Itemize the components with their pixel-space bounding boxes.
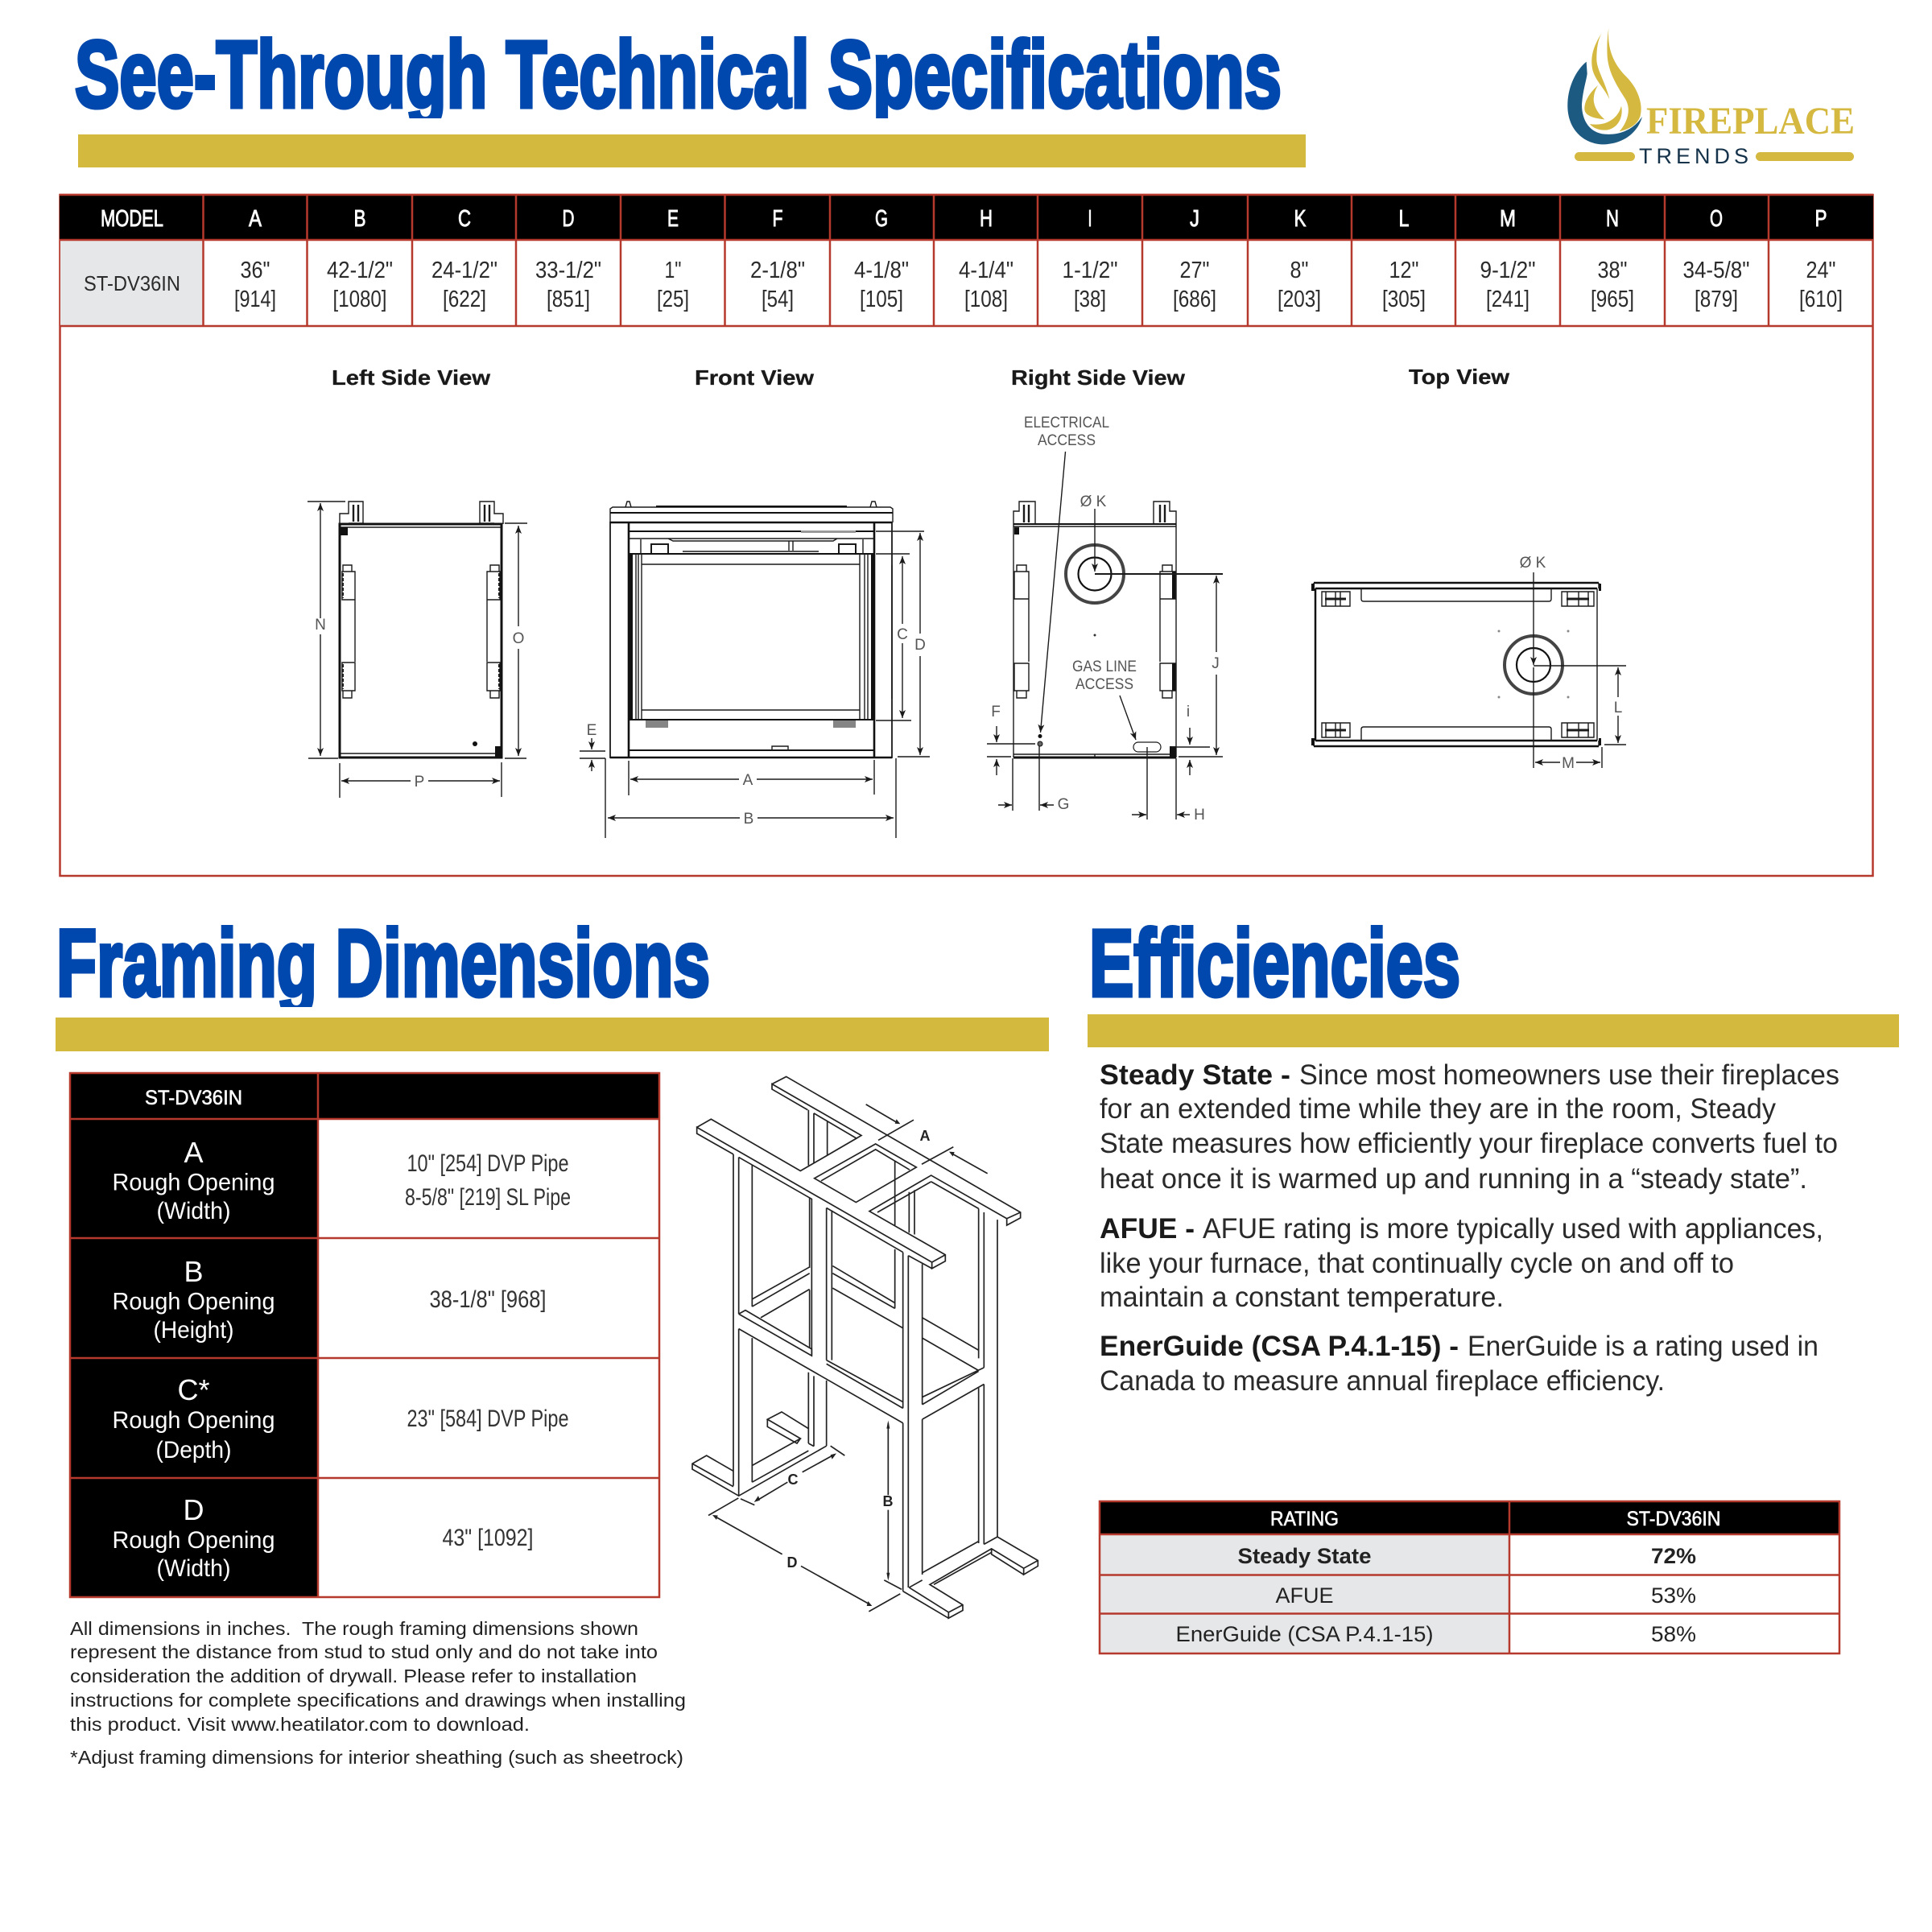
- framing gold bar: [56, 1018, 1049, 1051]
- efficiency rating table: [1100, 1501, 1839, 1653]
- table values: [686]: [1173, 287, 1216, 312]
- row B: Rough Opening: [113, 1288, 275, 1315]
- row A: [113, 1136, 571, 1224]
- framing dimension labels: B: [882, 1493, 894, 1509]
- row A: (Width): [156, 1198, 230, 1224]
- table header: N: [1606, 206, 1619, 232]
- heading: left side view: Left Side View: [332, 365, 491, 390]
- title gold bar: [78, 134, 1306, 167]
- table values: 1-1/2": [1063, 258, 1117, 283]
- table values: 36": [240, 258, 270, 283]
- icon: flame: [1567, 28, 1642, 144]
- table header: B: [354, 206, 365, 232]
- table values: [38]: [1074, 287, 1106, 312]
- row C: Rough Opening: [113, 1407, 275, 1434]
- table header: I: [1088, 206, 1092, 232]
- diagram: front view: E: [587, 722, 597, 739]
- framing dimension labels: [787, 1128, 931, 1571]
- callout: gas line access: ACCESS: [1075, 676, 1133, 693]
- panel frame: [60, 195, 1872, 876]
- table header: K: [1294, 206, 1307, 232]
- steady state paragraph: for an extended time while they are in the room, Steady: [1100, 1093, 1776, 1125]
- table values: 33-1/2": [535, 258, 601, 283]
- diagram: right side view: H: [1194, 807, 1205, 824]
- table values: [234, 258, 1843, 312]
- AFUE paragraph: AFUE rating is more typically used with appliances,: [1203, 1213, 1823, 1245]
- logo subtitle: TRENDS: [1639, 144, 1748, 168]
- rating: EnerGuide: EnerGuide (CSA P.4.1-15): [1175, 1622, 1433, 1646]
- diagram: left side view: O: [513, 630, 524, 647]
- table values: 24-1/2": [431, 258, 497, 283]
- rating table header: ST-DV36IN: [1626, 1508, 1721, 1530]
- table header: H: [980, 206, 993, 232]
- steady state paragraph: [1100, 1059, 1839, 1195]
- row B: 38-1/8" [968]: [430, 1286, 546, 1313]
- table values: 42-1/2": [327, 258, 393, 283]
- heading: efficiencies: Efficiencies: [1089, 910, 1460, 1017]
- table header: C: [458, 206, 471, 232]
- EnerGuide paragraph: [1100, 1331, 1818, 1397]
- panel: specifications table and views: [60, 195, 1873, 876]
- framing footnotes: this product. Visit www.heatilator.com to download.: [70, 1714, 530, 1735]
- table header: [60, 195, 1873, 240]
- table values: 4-1/4": [959, 258, 1013, 283]
- table values: 24": [1806, 258, 1835, 283]
- diagram: right side view: Ø K: [1080, 493, 1107, 510]
- rating: AFUE: AFUE: [1275, 1583, 1333, 1608]
- steady state paragraph: Since most homeowners use their fireplaces: [1299, 1059, 1839, 1091]
- table values: 4-1/8": [854, 258, 909, 283]
- table values: [1080]: [333, 287, 386, 312]
- table header: D: [562, 206, 575, 232]
- diagram: top view: Ø K: [1520, 555, 1546, 572]
- heading: framing dimensions: Framing Dimensions: [56, 910, 710, 1017]
- table header: F: [773, 206, 782, 232]
- diagram: front view: B: [744, 811, 753, 828]
- table header: E: [667, 206, 679, 232]
- row D: D: [184, 1493, 204, 1526]
- callout: gas line access: [1072, 658, 1137, 693]
- table values: [879]: [1695, 287, 1738, 312]
- table values: [305]: [1382, 287, 1426, 312]
- framing footnotes: All dimensions in inches. The rough framing dimensions shown: [70, 1618, 638, 1639]
- steady state paragraph: State measures how efficiently your fireplace converts fuel to: [1100, 1128, 1838, 1159]
- rating: steady state: [1238, 1544, 1696, 1568]
- framing dimension labels: D: [787, 1554, 797, 1571]
- diagram: top view: [1311, 555, 1626, 772]
- efficiencies text: [1100, 1059, 1839, 1397]
- framing footnotes: represent the distance from stud to stud only and do not take into: [70, 1641, 658, 1662]
- rating: AFUE: 53%: [1651, 1583, 1696, 1608]
- table header: M: [1500, 206, 1516, 232]
- framing footnotes: *Adjust framing dimensions for interior sheathing (such as sheetrock): [70, 1747, 683, 1768]
- table values: [241]: [1486, 287, 1530, 312]
- logo bars: [1575, 152, 1854, 161]
- heading: front view: Front View: [695, 365, 815, 390]
- table values: 1": [665, 258, 681, 283]
- title: See-Through Technical Specifications: [75, 22, 1282, 128]
- table values: 38": [1597, 258, 1628, 283]
- table values: [25]: [657, 287, 689, 312]
- logo: Fireplace Trends: [1567, 28, 1855, 168]
- EnerGuide paragraph: Canada to measure annual fireplace efficiency.: [1100, 1365, 1665, 1397]
- heading: top view: Top View: [1409, 365, 1510, 389]
- callout: gas line access: GAS LINE: [1072, 658, 1137, 675]
- table header: O: [1710, 206, 1723, 232]
- row C: C*: [177, 1373, 210, 1406]
- table values: [610]: [1799, 287, 1843, 312]
- table values: [54]: [762, 287, 794, 312]
- table values: [622]: [443, 287, 486, 312]
- row A: 8-5/8" [219] SL Pipe: [405, 1184, 571, 1211]
- efficiencies gold bar: [1088, 1014, 1899, 1047]
- framing table header: ST-DV36IN: [145, 1087, 242, 1109]
- diagram: right side view: G: [1058, 796, 1069, 813]
- logo wordmark: FIREPLACE: [1646, 100, 1855, 142]
- EnerGuide paragraph: EnerGuide is a rating used in: [1468, 1331, 1818, 1362]
- callout: electrical access: ELECTRICAL: [1024, 415, 1109, 431]
- row A: 10" [254] DVP Pipe: [407, 1150, 568, 1177]
- table values: 8": [1290, 258, 1309, 283]
- framing dimensions table: [70, 1073, 659, 1597]
- framing dimension labels: A: [919, 1128, 931, 1144]
- table values: [108]: [964, 287, 1008, 312]
- framing dimension labels: C: [787, 1472, 799, 1488]
- table values: [105]: [860, 287, 903, 312]
- diagram: right side view: J: [1212, 655, 1220, 672]
- diagram: left side view: N: [315, 617, 326, 634]
- row C: 23" [584] DVP Pipe: [407, 1406, 568, 1432]
- table header: P: [1814, 206, 1827, 232]
- table header: A: [249, 206, 262, 232]
- table values: 2-1/8": [750, 258, 805, 283]
- diagram: front view: D: [914, 637, 926, 654]
- framing footnotes: instructions for complete specifications and drawings when installing: [70, 1690, 686, 1711]
- row B: [113, 1255, 546, 1344]
- AFUE paragraph: maintain a constant temperature.: [1100, 1282, 1504, 1313]
- callout: electrical access: [1024, 415, 1109, 449]
- framing footnotes: consideration the addition of drywall. Please refer to installation: [70, 1666, 637, 1686]
- heading: right side view: Right Side View: [1011, 365, 1186, 390]
- rating: EnerGuide: [1175, 1622, 1696, 1646]
- rating table header: RATING: [1270, 1508, 1339, 1530]
- row D: Rough Opening: [113, 1527, 275, 1554]
- diagram: front view: C: [897, 626, 908, 643]
- EnerGuide paragraph: EnerGuide (CSA P.4.1-15) -: [1100, 1331, 1459, 1362]
- steady state paragraph: heat once it is warmed up and running in a “steady state”.: [1100, 1163, 1807, 1195]
- row C: [113, 1373, 568, 1463]
- framing lines: [692, 1076, 1038, 1618]
- rating: steady state: Steady State: [1238, 1544, 1372, 1568]
- row D: [113, 1493, 533, 1582]
- table values: 12": [1389, 258, 1418, 283]
- row A: A: [184, 1136, 204, 1169]
- diagram: right side view: [987, 415, 1223, 824]
- diagram: left side view: P: [415, 774, 424, 791]
- table values: [914]: [234, 287, 276, 312]
- row A: Rough Opening: [113, 1169, 275, 1196]
- diagram: left side view: [308, 502, 527, 798]
- diagram: top view: M: [1562, 755, 1575, 772]
- diagram: front view: A: [743, 772, 753, 789]
- diagram: right side view: i: [1187, 704, 1190, 720]
- callout: electrical access: ACCESS: [1038, 432, 1096, 449]
- row C: (Depth): [156, 1437, 232, 1463]
- diagram: right side view: F: [991, 704, 1001, 720]
- table header: MODEL: [101, 206, 163, 232]
- row D: 43" [1092]: [443, 1525, 533, 1551]
- model cell: [60, 240, 204, 326]
- rating: EnerGuide: 58%: [1651, 1622, 1696, 1646]
- diagram: front view: [580, 502, 930, 838]
- rating: AFUE: [1275, 1583, 1696, 1608]
- table values: 34-5/8": [1682, 258, 1750, 283]
- framing footnotes: [70, 1618, 686, 1768]
- table header: J: [1190, 206, 1199, 232]
- table values: [965]: [1591, 287, 1634, 312]
- table values: 27": [1180, 258, 1209, 283]
- row B: B: [184, 1255, 204, 1288]
- rating table header: [1270, 1508, 1721, 1530]
- row D: (Width): [156, 1555, 230, 1582]
- table header: L: [1399, 206, 1409, 232]
- AFUE paragraph: AFUE -: [1100, 1213, 1195, 1245]
- row B: (Height): [153, 1317, 233, 1344]
- AFUE paragraph: [1100, 1213, 1823, 1313]
- table header: G: [875, 206, 888, 232]
- AFUE paragraph: like your furnace, that continually cycle on and off to: [1100, 1248, 1734, 1279]
- rating: steady state: 72%: [1651, 1544, 1696, 1568]
- table values: 9-1/2": [1480, 258, 1536, 283]
- steady state paragraph: Steady State -: [1100, 1059, 1290, 1091]
- framing diagram: [692, 1076, 1038, 1618]
- table values: [851]: [547, 287, 590, 312]
- table values: [203]: [1278, 287, 1321, 312]
- model cell: ST-DV36IN: [84, 271, 180, 295]
- diagram: top view: L: [1614, 700, 1622, 716]
